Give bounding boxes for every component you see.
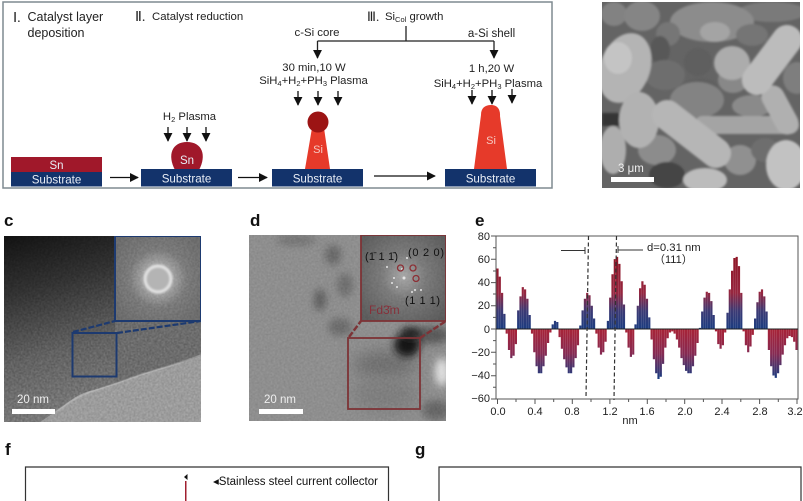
step 3: c-Si core: 4 xyxy=(277,79,282,88)
FFT inset xyxy=(361,235,446,321)
heading: catalyst layer deposition xyxy=(13,10,103,40)
x axis labels xyxy=(490,406,803,427)
step 3: c-Si core: 30 min,10 W xyxy=(282,62,346,74)
label: c: c xyxy=(4,211,13,230)
label: a-Si shell: a-Si shell xyxy=(468,28,515,40)
x axis labels: 1.6 xyxy=(639,406,655,418)
arrow: step 1 to 2 xyxy=(110,176,138,178)
panel: g frame xyxy=(439,467,801,501)
step 4: a-Si shell: 4 xyxy=(452,82,456,91)
y axis labels: 0 xyxy=(484,324,490,336)
y axis labels: 40 xyxy=(478,277,490,289)
step 1: Sn on substrate: Substrate xyxy=(32,174,81,186)
annotation: d-spacing xyxy=(647,242,701,266)
step 2: Sn droplet on substrate: Sn xyxy=(180,155,194,167)
y axis labels xyxy=(471,231,490,405)
arrow: step 2 to 3 xyxy=(238,176,267,178)
x axis labels: nm xyxy=(622,415,638,427)
label: H2 plasma: Plasma xyxy=(175,111,217,123)
heading: catalyst layer deposition: Ⅰ. xyxy=(13,11,21,26)
FFT inset: (0 2 0) xyxy=(408,247,444,259)
panel: SEM image xyxy=(589,1,803,192)
heading: SiCol growth xyxy=(367,9,443,24)
heading: catalyst reduction xyxy=(135,10,243,25)
arrow: step 3 to 4 xyxy=(374,175,435,177)
FFT inset xyxy=(115,236,201,321)
label: e: e xyxy=(475,211,484,230)
branching tree arrows xyxy=(318,26,494,58)
label: H2 plasma: H xyxy=(163,111,171,123)
panel: TEM image c xyxy=(4,236,201,422)
heading: SiCol growth: Ⅲ. xyxy=(367,9,379,24)
step 4: a-Si shell: Substrate xyxy=(466,172,515,186)
heading: SiCol growth: growth xyxy=(406,11,443,23)
x axis labels: 0.4 xyxy=(527,406,543,418)
x axis labels: 2.4 xyxy=(714,406,730,418)
x axis labels: 0.8 xyxy=(564,406,580,418)
heading: catalyst reduction: Catalyst reduction xyxy=(152,11,243,23)
label: f: f xyxy=(5,440,11,459)
bars xyxy=(498,257,796,379)
x axis labels: 3.2 xyxy=(787,406,803,418)
plasma arrows xyxy=(472,89,512,104)
step 4: a-Si shell xyxy=(434,63,543,186)
FFT inset: (1̄ 1 1̄) xyxy=(365,251,398,263)
panel: synthesis schematic xyxy=(3,2,552,188)
heading: catalyst layer deposition: deposition xyxy=(28,26,85,40)
step 4: a-Si shell: +PH xyxy=(475,78,497,90)
y axis labels: 60 xyxy=(478,254,490,266)
plasma arrows xyxy=(168,127,206,141)
y axis labels: 80 xyxy=(478,231,490,243)
FFT inset: (1 1 1) xyxy=(405,295,440,307)
step 2: Sn droplet on substrate xyxy=(141,111,232,186)
FFT inset: Fd3̄m xyxy=(369,303,400,317)
panel: f cell schematic xyxy=(26,467,388,501)
x axis labels: 2.8 xyxy=(752,406,768,418)
panel: line profile chart xyxy=(471,231,803,427)
selection box and zoom lines xyxy=(348,321,446,409)
heading: SiCol growth: Si xyxy=(385,11,395,23)
y axis labels: −20 xyxy=(471,347,490,359)
selection box and zoom lines xyxy=(72,321,201,376)
step 3: c-Si core: Plasma xyxy=(327,75,369,87)
panel: TEM image d xyxy=(249,234,450,421)
label: H2 plasma: 2 xyxy=(171,115,175,124)
scale bar: 3 um xyxy=(611,163,654,182)
scale bar: 3 um: 3 μm xyxy=(618,163,644,175)
step 3: c-Si core: 3 xyxy=(323,79,327,88)
step 4: a-Si shell: 3 xyxy=(497,82,501,91)
step 2: Sn droplet on substrate: Substrate xyxy=(162,172,211,186)
annotation: d-spacing: d=0.31 nm xyxy=(647,242,701,254)
scale bar: 20 nm: 20 nm xyxy=(17,394,49,406)
label: stainless steel current collector: ◂Stainless steel current collector xyxy=(213,476,378,488)
annotation: d-spacing: （111） xyxy=(654,253,693,266)
heading: SiCol growth: Col xyxy=(395,15,407,24)
label: g: g xyxy=(415,440,425,459)
label: d: d xyxy=(250,211,260,230)
heading: catalyst layer deposition: Catalyst layer xyxy=(28,10,103,24)
step 1: Sn on substrate: Sn xyxy=(49,160,64,172)
y axis labels: −60 xyxy=(471,393,490,405)
step 1: Sn on substrate xyxy=(11,157,102,186)
scale bar: 20 nm xyxy=(12,394,55,414)
label: c-Si core: c-Si core xyxy=(295,27,339,39)
step 3: c-Si core: +H xyxy=(282,75,296,87)
step 3: c-Si core: 2 xyxy=(296,79,301,88)
step 4: a-Si shell: Plasma xyxy=(501,78,543,90)
x axis labels: 2.0 xyxy=(677,406,693,418)
y axis labels: 20 xyxy=(478,300,490,312)
step 4: a-Si shell: Si xyxy=(486,135,496,147)
current collector xyxy=(184,474,188,480)
step 4: a-Si shell: SiH xyxy=(434,78,452,90)
step 4: a-Si shell: 2 xyxy=(471,82,475,91)
x axis labels: 0.0 xyxy=(490,406,506,418)
step 3: c-Si core: Substrate xyxy=(293,172,342,186)
step 4: a-Si shell: 1 h,20 W xyxy=(469,63,514,75)
x axis labels: 1.2 xyxy=(602,406,618,418)
scale bar: 20 nm: 20 nm xyxy=(264,394,296,406)
step 3: c-Si core: +PH xyxy=(301,75,323,87)
y axis labels: −40 xyxy=(471,370,490,382)
axes xyxy=(491,236,798,404)
step 4: a-Si shell: +H xyxy=(456,78,471,90)
d-spacing markers xyxy=(561,236,643,400)
step 3: c-Si core xyxy=(259,62,369,186)
scale bar: 20 nm xyxy=(259,394,303,414)
plasma arrows xyxy=(298,91,338,105)
heading: catalyst reduction: Ⅱ. xyxy=(135,10,145,25)
step 3: c-Si core: Si xyxy=(313,144,323,156)
step 3: c-Si core: SiH xyxy=(259,75,277,87)
